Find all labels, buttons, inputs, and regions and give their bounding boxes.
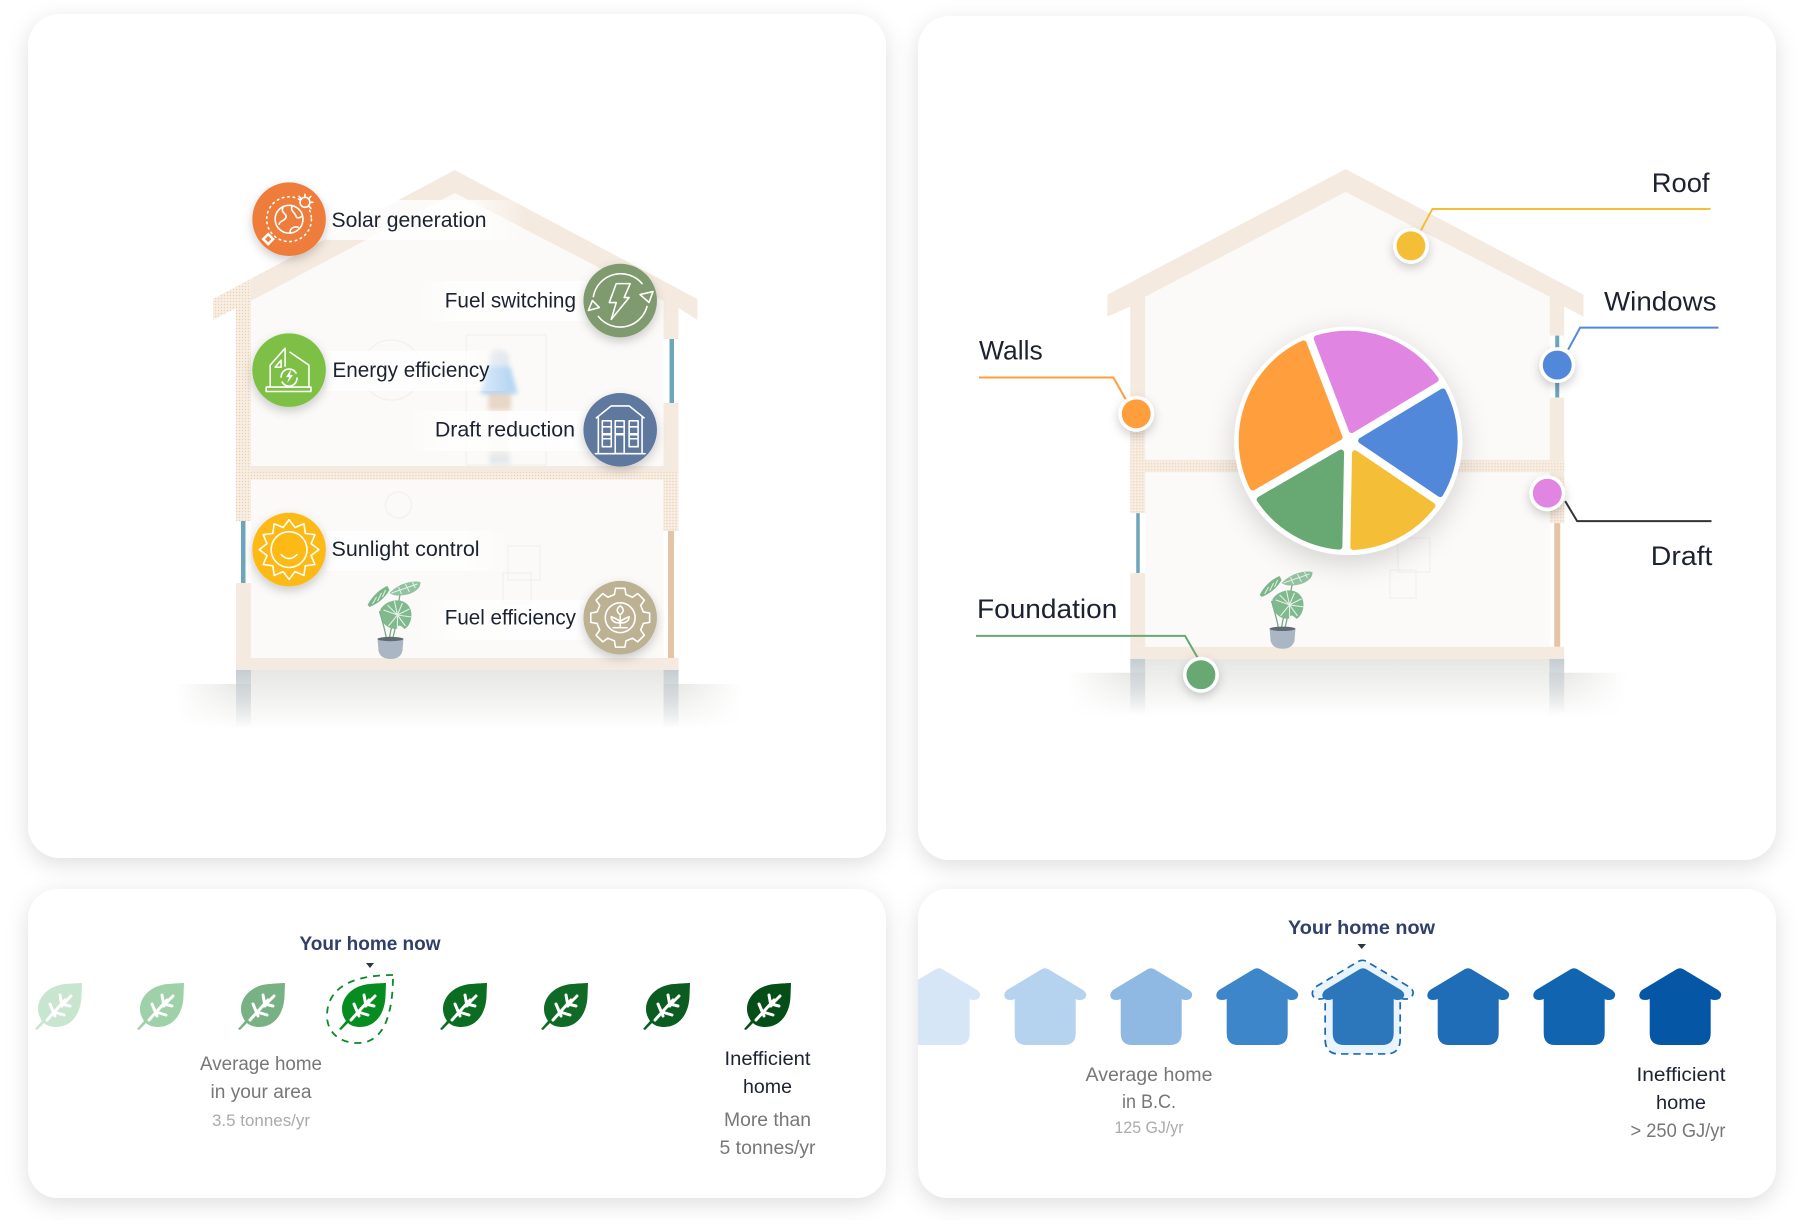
wedge: windows — [1361, 391, 1455, 494]
label: inefficient home: home — [743, 1077, 792, 1098]
label: average home in your area — [200, 1054, 322, 1130]
label: inefficient home: More than — [724, 1110, 811, 1131]
label: draft reduction: Draft reduction — [435, 419, 575, 442]
wedge: draft — [1317, 334, 1436, 430]
house cross-section — [1107, 169, 1584, 659]
callout: draft: Draft — [1651, 541, 1713, 571]
icon: fuel efficiency — [583, 581, 657, 654]
wedge: roof — [1353, 453, 1432, 547]
label: inefficient home: Inefficient — [724, 1049, 811, 1070]
label backgrounds — [326, 200, 588, 640]
label: your home now: Your home now — [1288, 918, 1435, 939]
callout: walls: Walls — [979, 336, 1043, 366]
label: average home in B.C. — [1086, 1065, 1212, 1137]
label: sunlight control: Sunlight control — [332, 538, 480, 561]
label: average home in B.C.: 125 GJ/yr — [1114, 1118, 1184, 1137]
icon: solar generation — [252, 182, 326, 256]
label: average home in your area: Average home — [200, 1054, 322, 1075]
person — [480, 350, 518, 465]
label: fuel switching: Fuel switching — [445, 289, 576, 312]
plant — [1260, 572, 1312, 649]
callout: windows: Windows — [1604, 287, 1716, 317]
panel: heat loss house — [918, 16, 1776, 860]
label: fuel efficiency: Fuel efficiency — [445, 607, 577, 630]
callout: walls — [979, 336, 1154, 432]
faint room furniture — [362, 335, 546, 603]
label: inefficient home: Inefficient — [1636, 1065, 1726, 1086]
label: inefficient home: > 250 GJ/yr — [1630, 1121, 1726, 1142]
label: solar generation: Solar generation — [332, 209, 487, 232]
callout: draft — [1529, 475, 1713, 571]
label: average home in your area: 3.5 tonnes/yr — [212, 1111, 310, 1130]
callout: windows — [1539, 287, 1718, 383]
wedge: walls — [1242, 343, 1340, 488]
panel: emissions scale — [28, 889, 886, 1198]
label: average home in your area: in your area — [210, 1082, 312, 1103]
callout: foundation: Foundation — [977, 594, 1117, 624]
ground shadow — [195, 670, 722, 724]
label: inefficient home — [1630, 1065, 1726, 1142]
label: inefficient home — [720, 1049, 816, 1159]
marker triangle — [366, 963, 374, 968]
leaf scale — [35, 983, 791, 1030]
label: inefficient home: 5 tonnes/yr — [720, 1138, 816, 1159]
marker triangle — [1358, 944, 1366, 949]
label: average home in B.C.: Average home — [1086, 1065, 1212, 1086]
callout: foundation — [976, 594, 1219, 693]
panel: energy scale — [898, 889, 1776, 1198]
callout: roof — [1393, 168, 1711, 264]
house cross-section — [213, 170, 697, 670]
pie chart — [1234, 327, 1462, 555]
label: energy efficiency: Energy efficiency — [332, 359, 490, 382]
house scale — [898, 968, 1721, 1045]
dashed current marker — [327, 975, 393, 1043]
dashed current marker — [1312, 960, 1413, 1054]
label: average home in B.C.: in B.C. — [1122, 1092, 1176, 1113]
icon: draft reduction — [583, 393, 657, 467]
label: inefficient home: home — [1656, 1093, 1706, 1114]
faint wall frames — [1390, 538, 1430, 598]
plant — [368, 582, 420, 659]
ground shadow — [1088, 658, 1606, 710]
label: your home now: Your home now — [300, 934, 441, 955]
icon: sunlight control — [252, 513, 326, 586]
icon: fuel switching — [583, 264, 657, 337]
wedge: foundation — [1260, 453, 1341, 547]
callout: roof: Roof — [1652, 168, 1710, 198]
panel: actions house — [28, 14, 886, 858]
icon: energy efficiency — [252, 333, 326, 407]
